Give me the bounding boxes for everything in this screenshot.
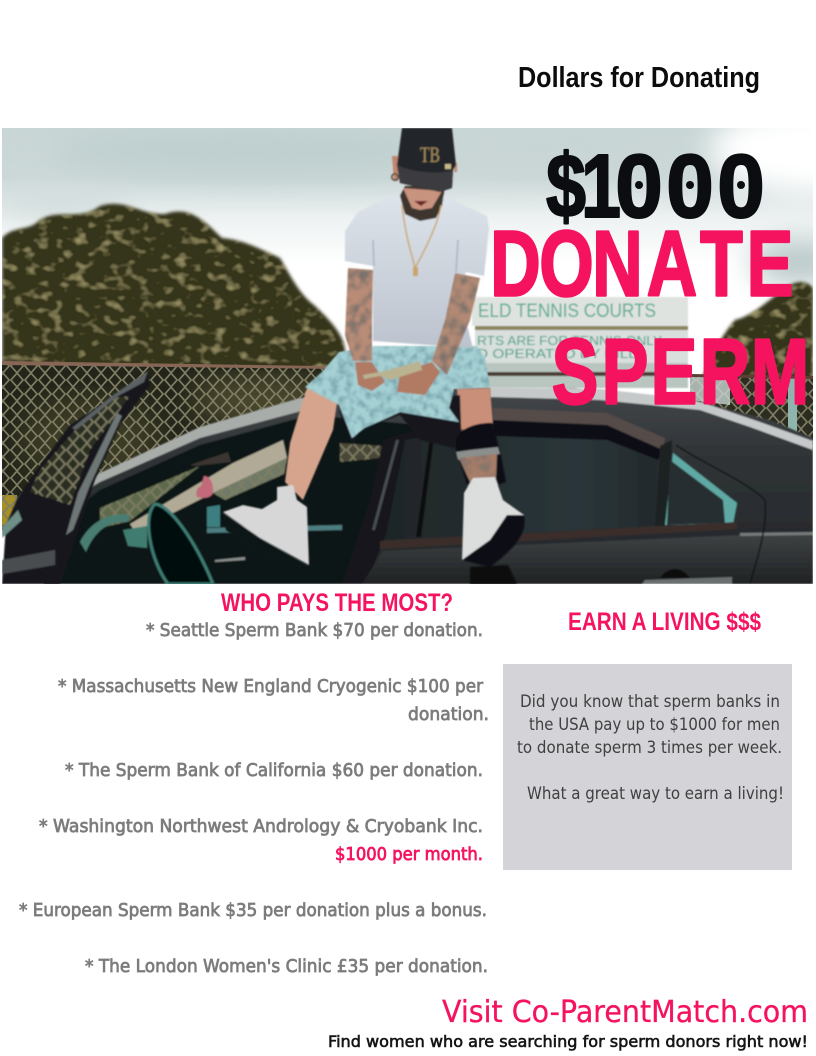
door handle — [660, 569, 690, 578]
callout panel: earn a living: the USA pay up to $1000 for men — [529, 715, 780, 734]
black trouser shadow behind shin — [460, 454, 506, 487]
door seam — [676, 445, 765, 584]
list of sperm banks and payments: * European Sperm Bank $35 per donation plus a bonus. — [19, 901, 487, 921]
cash — [363, 361, 422, 380]
seat and dashboard — [80, 514, 130, 552]
tennis court sign: D OPERATED BY HILLS — [477, 346, 647, 361]
tattooed shin — [459, 454, 497, 482]
gold chain — [402, 205, 441, 268]
quarter window — [665, 453, 737, 525]
window trim — [380, 522, 737, 549]
callout panel: earn a living — [503, 664, 792, 870]
sky — [2, 128, 813, 292]
list of sperm banks and payments: * Washington Northwest Andrology & Cryobank Inc. — [39, 817, 483, 837]
windscreen with fence behind — [100, 466, 200, 528]
t-shirt — [345, 196, 489, 348]
ear and earring — [392, 156, 398, 181]
list of sperm banks and payments: * Massachusetts New England Cryogenic $100 per — [58, 677, 484, 697]
SPERM headline: SPERM — [552, 321, 809, 424]
headliner — [130, 440, 287, 532]
list of sperm banks and payments: * The Sperm Bank of California $60 per donation. — [65, 761, 483, 781]
title: Dollars for Donating — [518, 62, 760, 94]
callout panel: earn a living: to donate sperm 3 times per week. — [517, 738, 782, 757]
rear view mirror — [190, 452, 231, 466]
right shoe — [462, 477, 524, 560]
DONATE headline: DONATE — [490, 213, 793, 316]
car body — [44, 388, 813, 584]
dark underside of shorts — [339, 395, 462, 450]
tennis court sign: RTS ARE FOR TENNIS ONLY — [477, 333, 662, 348]
cap — [397, 128, 456, 192]
open car door — [2, 371, 150, 584]
front window opening — [50, 415, 420, 584]
left leg — [285, 388, 337, 500]
$1000 headline: $1 — [546, 136, 621, 237]
footer tagline: Find women who are searching for sperm donors right now! — [328, 1032, 808, 1051]
tennis court sign: ELD TENNIS COURTS — [478, 301, 656, 322]
rain guard — [493, 408, 665, 450]
right arm — [432, 273, 480, 375]
list of sperm banks and payments: $1000 per month. — [335, 845, 483, 865]
left shoe — [223, 485, 309, 565]
neck and face — [400, 186, 445, 221]
heading: who pays the most: WHO PAYS THE MOST? — [221, 589, 453, 617]
steering wheel — [149, 504, 213, 584]
shorts — [305, 346, 490, 438]
call to action: Visit Co-ParentMatch.com — [442, 995, 808, 1030]
door pillar — [342, 432, 418, 584]
bandana — [456, 423, 500, 457]
rear side window — [385, 435, 658, 540]
b pillar — [655, 440, 672, 526]
list of sperm banks and payments: * Seattle Sperm Bank $70 per donation. — [146, 621, 483, 641]
roof highlight — [490, 387, 813, 450]
$1000 headline — [546, 136, 765, 237]
list of sperm banks and payments: donation. — [408, 705, 489, 725]
list of sperm banks and payments — [19, 621, 489, 977]
dark band above window — [493, 420, 663, 460]
door sill — [207, 525, 342, 533]
man: TB — [420, 142, 440, 167]
tennis court sign — [472, 297, 688, 388]
left arm — [345, 268, 373, 361]
hero photo: man sitting on a car — [0, 105, 816, 584]
list of sperm banks and payments: * The London Women's Clinic £35 per donation. — [85, 957, 488, 977]
right tree — [701, 280, 813, 376]
car — [43, 387, 813, 584]
$1000 headline: 000 — [615, 136, 765, 236]
lower door panel — [362, 532, 813, 584]
right leg — [457, 388, 493, 430]
left tree — [2, 204, 345, 372]
man — [223, 128, 525, 584]
hands — [355, 362, 440, 395]
callout panel: earn a living: What a great way to earn a living! — [527, 784, 784, 803]
chain-link fence — [2, 361, 813, 530]
callout panel: earn a living: Did you know that sperm banks in — [520, 692, 780, 711]
air freshener — [196, 476, 213, 498]
heading: earn a living: EARN A LIVING $$$ — [568, 608, 761, 636]
